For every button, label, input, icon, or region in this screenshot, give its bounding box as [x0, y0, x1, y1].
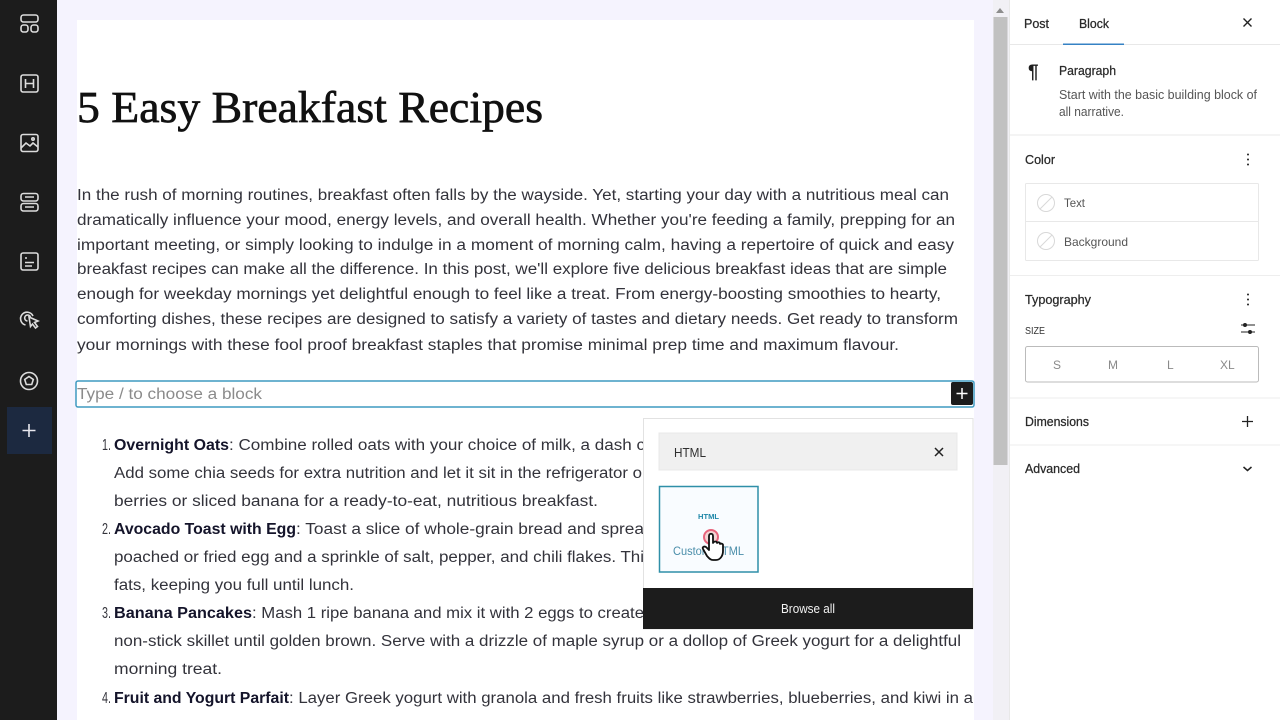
item 2: avocado toast: Avocado Toast with Egg [114, 521, 296, 538]
size selector: XL [1220, 358, 1235, 372]
icon: expand advanced [1244, 467, 1252, 470]
dimensions section [1025, 415, 1253, 429]
item 3: banana pancakes: 3. [102, 605, 111, 622]
icon: image [21, 134, 38, 152]
item 3: banana pancakes [102, 605, 961, 678]
icon: heading [21, 75, 38, 92]
intro paragraph: important meeting, or simply looking to indulge in a moment of morning calm, having a repertoire of quick and easy [77, 237, 954, 254]
item 4: fruit and yogurt parfait: 4. [102, 690, 111, 707]
text color row: Text [1064, 196, 1086, 210]
icon: stacked rows [21, 194, 38, 211]
item 1: overnight oats: Add some chia seeds for extra nutrition and let it sit in the refrigerator o [114, 465, 642, 482]
icon: form card [21, 253, 38, 270]
item 3: banana pancakes: non-stick skillet until golden brown. Serve with a drizzle of maple syrup or a dollop of Greek yogurt for a delightful [114, 633, 961, 650]
sidebar tabs: Post [1024, 17, 1050, 31]
item 2: avocado toast: poached or fried egg and a sprinkle of salt, pepper, and chili flakes. Thi [114, 549, 644, 566]
editor canvas background [57, 0, 1010, 720]
color section [1025, 153, 1259, 260]
icon: hand cursor [703, 534, 723, 560]
scrollbar [993, 0, 1009, 720]
block card: Start with the basic building block of [1059, 88, 1258, 102]
item 3: banana pancakes: : Mash 1 ripe banana and mix it with 2 eggs to create [252, 605, 644, 622]
empty paragraph block with placeholder [76, 381, 974, 407]
intro paragraph [77, 187, 958, 354]
item 2: avocado toast: : Toast a slice of whole-grain bread and sprea [296, 521, 644, 538]
icon: star badge [20, 372, 38, 390]
advanced section: Advanced [1025, 462, 1080, 476]
icon: close sidebar [1244, 18, 1252, 26]
sidebar tabs: Block [1079, 17, 1110, 31]
block card [1028, 62, 1258, 119]
add block button [7, 407, 52, 454]
click indicator ring [704, 530, 718, 544]
icon: clear search [935, 448, 943, 456]
item 1: overnight oats: 1. [102, 437, 111, 454]
color section: Color [1025, 153, 1055, 167]
item 1: overnight oats [102, 437, 645, 510]
intro paragraph: your mornings with these fool proof breakfast staples that promise minimal prep time and maximum flavour. [77, 337, 899, 354]
block card: all narrative. [1059, 105, 1124, 119]
custom html block result [660, 486, 758, 572]
intro paragraph: In the rush of morning routines, breakfast often falls by the wayside. Yet, starting your day with a nutritious meal can [77, 187, 949, 204]
browse all button [643, 588, 973, 629]
sidebar tabs [1010, 17, 1280, 45]
search field [659, 433, 957, 470]
icon: layout grid [21, 15, 38, 32]
icon: size controls [1241, 324, 1255, 334]
item 2: avocado toast: 2. [102, 521, 111, 538]
advanced section [1025, 462, 1252, 476]
post page area [77, 20, 974, 720]
item 2: avocado toast [102, 521, 644, 594]
item 1: overnight oats: berries or sliced banana for a ready-to-eat, nutritious breakfast. [114, 493, 598, 510]
left icon toolbar [0, 0, 57, 720]
empty paragraph block with placeholder: Type / to choose a block [77, 386, 262, 403]
item 4: fruit and yogurt parfait: : Layer Greek yogurt with granola and fresh fruits like strawberries, blueberries, and kiwi in a [289, 690, 973, 707]
intro paragraph: enough for weekday mornings yet delightful enough to feel like a treat. From energy-boosting smoothies to hearty, [77, 286, 941, 303]
item 2: avocado toast: fats, keeping you full until lunch. [114, 577, 354, 594]
text color row [1038, 194, 1086, 212]
item 1: overnight oats: Overnight Oats [114, 437, 229, 454]
size selector: S [1053, 358, 1061, 372]
size selector [1026, 346, 1258, 382]
background color row: Background [1064, 235, 1128, 249]
right settings sidebar [1009, 0, 1280, 720]
item 3: banana pancakes: Banana Pancakes [114, 605, 252, 622]
browse all button: Browse all [781, 602, 835, 616]
typography section: Typography [1025, 293, 1092, 307]
item 4: fruit and yogurt parfait: Fruit and Yogurt Parfait [114, 690, 289, 707]
block search popup [643, 418, 973, 629]
item 1: overnight oats: : Combine rolled oats with your choice of milk, a dash c [229, 437, 645, 454]
item 3: banana pancakes: morning treat. [114, 661, 222, 678]
icon: color options menu [1247, 154, 1249, 166]
background color row [1038, 232, 1128, 250]
typography section: SIZE [1025, 326, 1045, 337]
intro paragraph: comforting dishes, these recipes are designed to satisfy a variety of tastes and dietary needs. Get ready to transform [77, 311, 958, 328]
size selector: L [1167, 358, 1174, 372]
icon: expand dimensions [1242, 416, 1253, 427]
search field: HTML [674, 446, 706, 460]
recipe list [102, 437, 973, 707]
intro paragraph: breakfast recipes can make all the difference. In this post, we'll explore five delicious breakfast ideas that are simple [77, 261, 947, 278]
dimensions section: Dimensions [1025, 415, 1089, 429]
custom html block result: Custom HTML [673, 546, 745, 558]
icon: click target [21, 312, 38, 328]
typography section [1025, 293, 1258, 382]
icon: block inserter plus [951, 382, 973, 405]
intro paragraph: dramatically influence your mood, energy levels, and overall health. Whether you're feeding a family, prepping for an [77, 212, 955, 229]
custom html block result: HTML [698, 512, 719, 521]
size selector: M [1108, 358, 1118, 372]
icon: typography options menu [1247, 294, 1249, 306]
block card: Paragraph [1059, 64, 1116, 78]
title: 5 Easy Breakfast Recipes [77, 83, 543, 132]
icon: pilcrow: ¶ [1028, 62, 1039, 83]
